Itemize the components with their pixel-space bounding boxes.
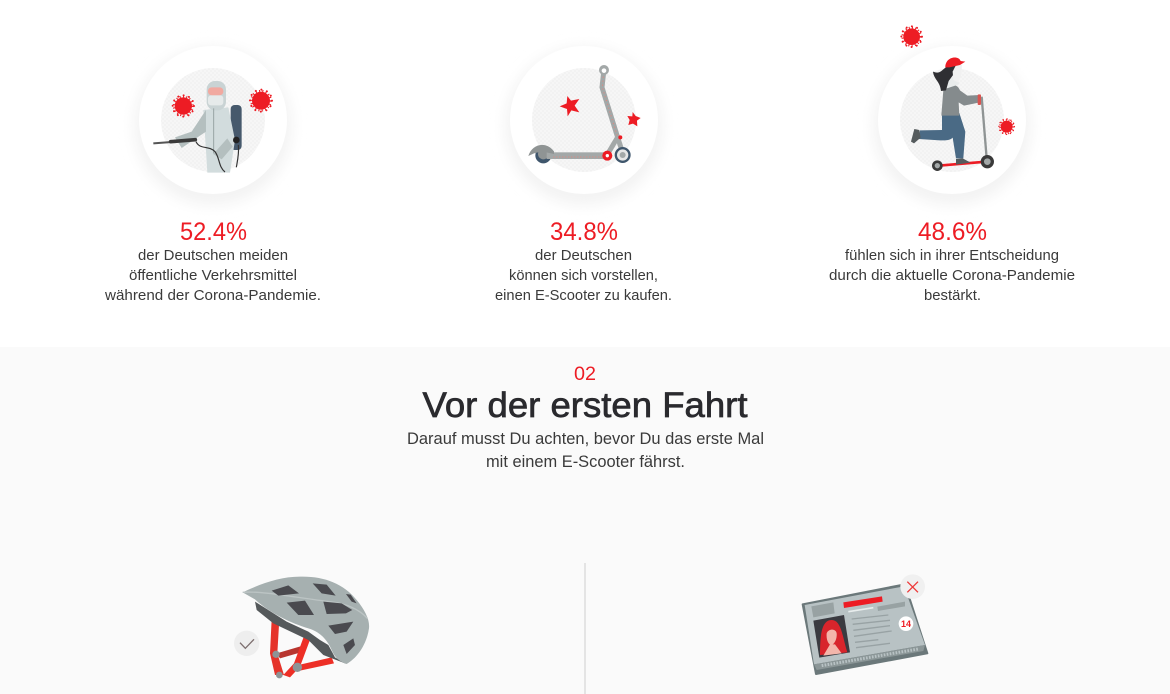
intro text: Darauf musst Du achten, bevor Du das erste Mal xyxy=(407,429,764,448)
icon: bicycle helmet with check mark xyxy=(234,577,369,678)
icon: driving licence with age 14 and cross xyxy=(803,574,927,674)
intro text xyxy=(407,429,764,471)
icon: cross badge xyxy=(900,574,925,599)
text: decision description xyxy=(829,247,1075,304)
icon: virus right xyxy=(250,90,272,112)
icon: virus top xyxy=(901,26,922,47)
icon: virus left xyxy=(173,95,194,117)
age badge: 14 xyxy=(901,619,911,629)
statistic: 34.8%: 34.8% xyxy=(550,218,618,246)
icon: check badge xyxy=(234,631,259,656)
licence header bar xyxy=(843,596,883,608)
text: public transport description: der Deutschen meiden xyxy=(138,247,288,264)
text: public transport description xyxy=(104,247,321,304)
text: decision description: fühlen sich in ihrer Entscheidung xyxy=(845,247,1059,264)
text: buying description: können sich vorstellen, xyxy=(509,267,658,284)
icon: woman riding scooter with mask xyxy=(873,26,1031,205)
text: buying description: einen E-Scooter zu kaufen. xyxy=(495,287,672,304)
panel: decision confirmed statistic xyxy=(829,26,1075,304)
licence photo xyxy=(813,615,850,658)
icon: star small xyxy=(627,112,641,126)
icon: virus right xyxy=(999,119,1014,134)
licence text lines xyxy=(852,615,892,648)
text: buying description: der Deutschen xyxy=(535,247,632,264)
icon: e-scooter with stars xyxy=(505,46,663,205)
panel: buying an e-scooter statistic xyxy=(495,46,672,304)
icon: person in protective suit disinfecting xyxy=(134,46,292,205)
text: public transport description: öffentliche Verkehrsmittel xyxy=(129,267,297,284)
text: public transport description: während der Corona-Pandemie. xyxy=(104,287,321,304)
panel: public transport statistic xyxy=(104,46,321,304)
statistic: 48.6%: 48.6% xyxy=(918,218,987,246)
intro text: mit einem E-Scooter fährst. xyxy=(486,452,685,471)
icon: star large xyxy=(560,96,579,116)
text: decision description: bestärkt. xyxy=(924,287,981,304)
heading: Vor der ersten Fahrt xyxy=(422,386,748,425)
section number: 02 xyxy=(574,364,596,385)
statistic: 52.4%: 52.4% xyxy=(180,218,247,246)
text: buying description xyxy=(495,247,672,304)
text: decision description: durch die aktuelle Corona-Pandemie xyxy=(829,267,1075,284)
